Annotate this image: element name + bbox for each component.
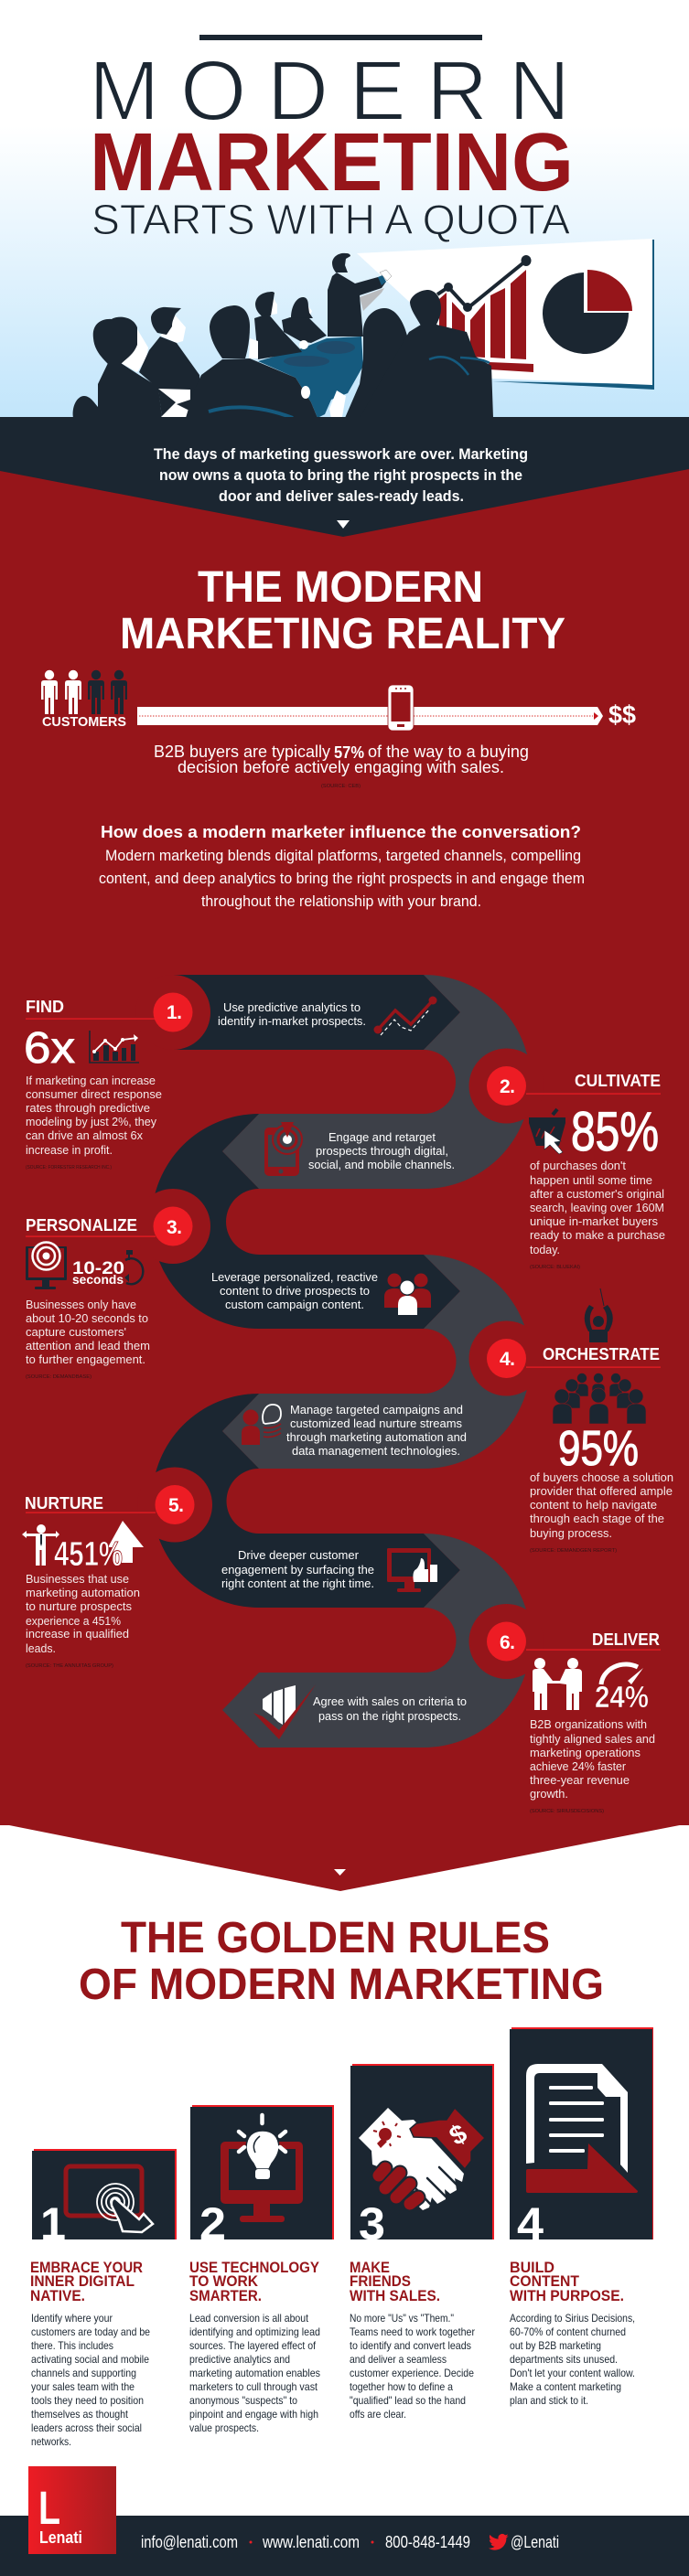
nurture source: (SOURCE: THE ANNUITAS GROUP) — [26, 1663, 113, 1669]
panel: cultivate — [526, 1072, 665, 1270]
stat 95%: 95% — [558, 1421, 639, 1476]
rule 2 paragraph: anonymous "suspects" to — [189, 2394, 297, 2407]
step 6 text — [313, 1695, 467, 1723]
rule 2 text — [189, 2259, 320, 2434]
rule 2 paragraph: value prospects. — [189, 2421, 259, 2434]
rule 3 paragraph: together how to define a — [350, 2380, 453, 2393]
question heading: How does a modern marketer influence the conversation? — [101, 823, 581, 841]
step number circles: 3. — [167, 1217, 182, 1238]
rule 4 paragraph: departments sits unused. — [510, 2353, 618, 2366]
rule 3 heading: WITH SALES. — [350, 2287, 440, 2304]
orchestrate text — [530, 1470, 673, 1540]
rule 1 paragraph: channels and supporting — [31, 2367, 136, 2379]
source: (SOURCE: CEB) — [321, 784, 361, 789]
personalize text: about 10-20 seconds to — [26, 1311, 148, 1325]
rule 3 heading: FRIENDS — [350, 2272, 411, 2290]
icon: handshake people — [533, 1658, 582, 1710]
rule 4 heading: WITH PURPOSE. — [510, 2287, 624, 2304]
down arrow — [337, 520, 350, 529]
rule 4 paragraph: plan and stick to it. — [510, 2394, 588, 2407]
cultivate text: happen until some time — [530, 1173, 652, 1187]
footer contacts: www.lenati.com — [262, 2533, 360, 2551]
nurture text: to nurture prospects — [26, 1599, 132, 1613]
rule 1 paragraph: your sales team with the — [31, 2380, 135, 2393]
rule 2 heading: USE TECHNOLOGY — [189, 2259, 320, 2276]
orchestrate heading: ORCHESTRATE — [543, 1345, 660, 1363]
dollar signs: $$ — [608, 700, 636, 729]
rule 4 paragraph: 60-70% of content churned — [510, 2325, 626, 2338]
find text: can drive an almost 6x — [26, 1128, 143, 1142]
customers icons — [41, 670, 127, 714]
rule 1 paragraph: themselves as thought — [31, 2408, 129, 2421]
rule 3 paragraph: customer experience. Decide — [350, 2367, 474, 2379]
step number circles: 4. — [500, 1349, 515, 1370]
icon: gauge — [601, 1664, 643, 1684]
icon: document — [526, 2064, 638, 2193]
nurture text: marketing automation — [26, 1586, 140, 1599]
panel: orchestrate — [526, 1288, 673, 1554]
step number circles — [154, 993, 526, 1661]
orchestrate text: buying process. — [530, 1526, 612, 1540]
numeral 3: 3 — [359, 2198, 385, 2250]
icon: tablet touch — [66, 2166, 153, 2232]
stat 451%: 451% — [54, 1535, 123, 1574]
rule 3 heading: MAKE — [350, 2259, 390, 2276]
nurture text: Businesses that use — [26, 1572, 129, 1586]
panel: rule 2 card — [190, 2105, 334, 2250]
rule 4 heading: CONTENT — [510, 2272, 580, 2290]
step 3 text — [211, 1271, 378, 1311]
rule 2 heading — [189, 2259, 320, 2304]
cultivate text: of purchases don't — [530, 1159, 626, 1172]
rule 3 paragraph: No more "Us" vs "Them." — [350, 2312, 454, 2325]
screen bar chart — [414, 270, 533, 372]
panel: personalize — [26, 1216, 156, 1380]
nurture text: increase in qualified — [26, 1627, 129, 1641]
nurture text: experience a 451% — [26, 1614, 121, 1628]
icon: trend line — [373, 997, 437, 1035]
deliver text: achieve 24% faster — [530, 1759, 627, 1773]
heading: the modern marketing reality — [120, 563, 565, 658]
rule 1 heading: INNER DIGITAL — [30, 2272, 135, 2290]
rule 3 paragraph: "qualified" lead so the hand — [350, 2394, 466, 2407]
heading: golden rules: OF MODERN MARKETING — [79, 1961, 604, 2009]
cultivate text: unique in-market buyers — [530, 1214, 658, 1228]
find source: (SOURCE: FORRESTER RESEARCH INC.) — [26, 1165, 112, 1170]
intro paragraph: Modern marketing blends digital platforms, targeted channels, compelling — [105, 847, 581, 864]
icon: conductor — [585, 1288, 613, 1342]
rule 1 text — [30, 2259, 150, 2448]
step number circles: 6. — [500, 1632, 515, 1653]
step 2 text: social, and mobile channels. — [308, 1159, 455, 1171]
title: starts with a quota: STARTS WITH A QUOTA — [92, 196, 570, 243]
rule 1 paragraph: tools they need to position — [31, 2394, 144, 2407]
lenati logo — [28, 2466, 116, 2554]
step 4 text: customized lead nurture streams — [290, 1417, 462, 1430]
rule 3 heading — [350, 2259, 440, 2304]
icon: monitor light bulb — [221, 2115, 303, 2222]
illustration: presentation scene — [73, 239, 654, 428]
ribbon notches — [135, 975, 544, 1679]
b2b statistic: decision before actively engaging with sales. — [178, 758, 504, 776]
rule 1 paragraph: customers are today and be — [31, 2325, 150, 2338]
panel: nurture — [22, 1494, 156, 1669]
sky background — [0, 0, 689, 421]
rule 1 heading: EMBRACE YOUR — [30, 2259, 143, 2276]
cultivate text — [530, 1159, 665, 1256]
presentation screen — [357, 239, 654, 390]
stat 85%: 85% — [571, 1101, 659, 1162]
icon: basket and cursor — [529, 1109, 565, 1154]
heading: golden rules: THE GOLDEN RULES — [121, 1914, 550, 1962]
red main section background — [0, 417, 689, 1825]
rule 4 paragraph: out by B2B marketing — [510, 2339, 601, 2352]
icon: people — [384, 1273, 431, 1315]
rule 4 paragraph: According to Sirius Decisions, — [510, 2312, 635, 2325]
rule 1 paragraph: leaders across their social — [31, 2421, 142, 2434]
icon: growth chart — [90, 1031, 139, 1063]
rule 2 paragraph: Lead conversion is all about — [189, 2312, 309, 2325]
icon: crowd — [553, 1374, 646, 1424]
step 1 text: identify in-market prospects. — [218, 1015, 366, 1028]
step 4 text — [286, 1404, 467, 1458]
orchestrate text: of buyers choose a solution — [530, 1470, 673, 1484]
step 3 text: content to drive prospects to — [220, 1285, 370, 1298]
find text: increase in profit. — [26, 1143, 113, 1157]
step 3 text: Leverage personalized, reactive — [211, 1271, 378, 1284]
footer contacts: info@lenati.com — [141, 2533, 238, 2551]
rule 4 paragraph: Don't let your content wallow. — [510, 2367, 635, 2379]
journey arrow bar — [137, 707, 603, 725]
rule 2 paragraph: marketers to cull through vast — [189, 2380, 318, 2393]
step 2 text: Engage and retarget — [328, 1131, 436, 1144]
rule 3 paragraph: and deliver a seamless — [350, 2353, 447, 2366]
icon: monitor thumbs up — [387, 1548, 437, 1592]
icon: mobile target — [264, 1122, 302, 1176]
b2b statistic: B2B buyers are typically — [154, 743, 330, 761]
find text: modeling by just 2%, they — [26, 1115, 156, 1128]
rule 1 paragraph: Identify where your — [31, 2312, 113, 2325]
step number circles: 2. — [500, 1076, 515, 1097]
nurture heading: NURTURE — [25, 1494, 103, 1512]
panel: find — [24, 998, 162, 1170]
presenter — [328, 253, 392, 337]
panel: rule 3 card — [350, 2064, 494, 2250]
rule 4 heading — [510, 2259, 624, 2304]
stat 10-20 seconds: seconds — [72, 1272, 124, 1287]
rule 1 paragraph — [31, 2312, 150, 2448]
rule 2 paragraph: pinpoint and engage with high — [189, 2408, 318, 2421]
personalize heading: PERSONALIZE — [26, 1216, 137, 1235]
icon: manager and messages — [242, 1405, 281, 1445]
audience silhouettes — [73, 290, 493, 428]
b2b statistic — [154, 743, 529, 776]
rule 2 paragraph — [189, 2312, 320, 2434]
rule 2 paragraph: predictive analytics and — [189, 2353, 290, 2366]
stat 10-20 seconds — [72, 1259, 124, 1287]
rule 3 text — [350, 2259, 475, 2421]
rule 1 paragraph: activating social and mobile — [31, 2353, 149, 2366]
step 4 text: Manage targeted campaigns and — [290, 1404, 463, 1416]
footer contacts: @Lenati — [511, 2533, 559, 2551]
step 5 text: engagement by surfacing the — [221, 1564, 374, 1577]
cultivate text: after a customer's original — [530, 1187, 664, 1201]
personalize text: to further engagement. — [26, 1352, 145, 1366]
numeral 1: 1 — [40, 2198, 66, 2250]
deliver text: B2B organizations with — [530, 1717, 647, 1731]
rule 4 text — [510, 2259, 635, 2407]
cultivate heading: CULTIVATE — [575, 1072, 661, 1090]
rule 1 paragraph: there. This includes — [31, 2339, 113, 2352]
footer contacts: 800-848-1449 — [385, 2533, 470, 2551]
intro text: now owns a quota to bring the right prospects in the — [159, 466, 522, 484]
numeral 4: 4 — [517, 2198, 544, 2250]
nurture text — [26, 1572, 140, 1655]
intro paragraph — [99, 847, 585, 910]
lenati logo: Lenati — [39, 2528, 82, 2547]
deliver text: growth. — [530, 1787, 568, 1801]
rule 3 paragraph — [350, 2312, 475, 2421]
heading: the modern marketing reality: THE MODERN — [198, 563, 483, 612]
orchestrate text: provider that offered ample — [530, 1484, 673, 1498]
rule 3 paragraph: to identify and convert leads — [350, 2339, 471, 2352]
intro text: The days of marketing guesswork are over. Marketing — [154, 445, 528, 463]
deliver text — [530, 1717, 655, 1801]
stat 24%: 24% — [595, 1680, 649, 1714]
down arrow — [334, 1869, 346, 1876]
ribbon segments — [151, 975, 531, 1748]
rule 2 paragraph: identifying and optimizing lead — [189, 2325, 320, 2338]
icon: handshake: $ — [445, 2119, 472, 2152]
icon: checkmark bars — [253, 1684, 316, 1739]
cultivate source: (SOURCE: BLUEKAI) — [530, 1265, 580, 1270]
find text: consumer direct response — [26, 1087, 162, 1101]
step 4 text: through marketing automation and — [286, 1431, 467, 1444]
step 2 text: prospects through digital, — [316, 1145, 448, 1158]
rule 1 heading — [30, 2259, 143, 2304]
step 6 text: Agree with sales on criteria to — [313, 1695, 467, 1708]
nurture text: leads. — [26, 1641, 56, 1655]
panel: rule 1 card — [32, 2149, 177, 2250]
find text — [26, 1074, 162, 1157]
orchestrate text: through each stage of the — [530, 1512, 664, 1525]
rule 4 heading: BUILD — [510, 2259, 554, 2276]
conference table — [258, 337, 363, 418]
orchestrate source: (SOURCE: DEMANDGEN REPORT) — [530, 1548, 617, 1554]
title: marketing: MARKETING — [90, 117, 574, 208]
step 2 text — [308, 1131, 455, 1171]
step 6 text: pass on the right prospects. — [318, 1710, 461, 1723]
intro paragraph: content, and deep analytics to bring the right prospects in and engage them — [99, 870, 585, 887]
customers label: CUSTOMERS — [42, 714, 126, 730]
step number circles: 1. — [167, 1002, 182, 1023]
stat 10-20 seconds: 10-20 — [72, 1259, 124, 1278]
personalize source: (SOURCE: DEMANDBASE) — [26, 1374, 92, 1380]
step 5 text: Drive deeper customer — [238, 1549, 359, 1562]
orchestrate text: content to help navigate — [530, 1498, 657, 1512]
intro paragraph: throughout the relationship with your brand. — [201, 893, 481, 910]
step 3 text: custom campaign content. — [225, 1299, 364, 1311]
footer bar — [0, 2516, 689, 2576]
rule 3 paragraph: offs are clear. — [350, 2408, 406, 2421]
icon: target monitor and stopwatch — [26, 1242, 143, 1289]
personalize text: Businesses only have — [26, 1298, 136, 1311]
cultivate text: today. — [530, 1243, 560, 1256]
deliver heading: DELIVER — [592, 1630, 660, 1649]
lenati logo: L — [38, 2482, 60, 2534]
numeral 2: 2 — [199, 2198, 226, 2250]
screen pie chart — [543, 270, 632, 354]
icon: twitter bird — [489, 2534, 509, 2550]
process ribbon — [135, 975, 544, 1748]
rule 1 paragraph: networks. — [31, 2435, 71, 2448]
rule 2 paragraph: marketing automation enables — [189, 2367, 320, 2379]
footer contacts — [141, 2533, 559, 2551]
rule 4 paragraph: Make a content marketing — [510, 2380, 621, 2393]
rule 3 paragraph: Teams need to work together — [350, 2325, 475, 2338]
personalize text: attention and lead them — [26, 1339, 150, 1352]
find heading: FIND — [26, 998, 64, 1016]
stat 6x: 6x — [24, 1024, 75, 1073]
icon: arrow and person — [22, 1521, 144, 1566]
step number circles: 5. — [168, 1495, 184, 1516]
panel: deliver — [526, 1630, 661, 1814]
step 4 text: data management technologies. — [292, 1445, 460, 1458]
deliver text: marketing operations — [530, 1746, 641, 1759]
rule 1 heading: NATIVE. — [30, 2287, 85, 2304]
title: modern: MODERN — [89, 43, 570, 138]
step 5 text: right content at the right time. — [221, 1577, 374, 1590]
step 1 text — [218, 1001, 366, 1028]
rule 2 paragraph: sources. The layered effect of — [189, 2339, 317, 2352]
intro text: door and deliver sales-ready leads. — [219, 487, 464, 505]
b2b statistic: of the way to a buying — [368, 743, 529, 761]
b2b statistic: 57% — [334, 743, 364, 762]
personalize text — [26, 1298, 150, 1366]
phone icon — [388, 685, 414, 731]
icon: handshake — [359, 2108, 485, 2210]
rule 2 heading: SMARTER. — [189, 2287, 262, 2304]
rule 2 heading: TO WORK — [189, 2272, 259, 2290]
step 5 text — [221, 1549, 374, 1590]
top rule — [199, 35, 482, 40]
find text: If marketing can increase — [26, 1074, 156, 1087]
heading: golden rules — [79, 1914, 604, 2009]
deliver source: (SOURCE: SIRIUSDECISIONS) — [530, 1809, 604, 1814]
deliver text: three-year revenue — [530, 1773, 630, 1787]
panel: rule 4 card — [510, 2027, 653, 2250]
deliver text: tightly aligned sales and — [530, 1732, 655, 1746]
cultivate text: search, leaving over 160M — [530, 1201, 664, 1214]
screen trend line — [437, 255, 531, 312]
rule 4 paragraph — [510, 2312, 635, 2407]
heading: the modern marketing reality: MARKETING REALITY — [120, 610, 565, 658]
dark intro chevron band — [0, 417, 689, 537]
red section bottom chevron — [0, 1823, 689, 1891]
step 1 text: Use predictive analytics to — [223, 1001, 361, 1014]
find text: rates through predictive — [26, 1101, 150, 1115]
intro text — [154, 445, 528, 505]
personalize text: capture customers' — [26, 1325, 126, 1339]
cultivate text: ready to make a purchase — [530, 1228, 665, 1242]
